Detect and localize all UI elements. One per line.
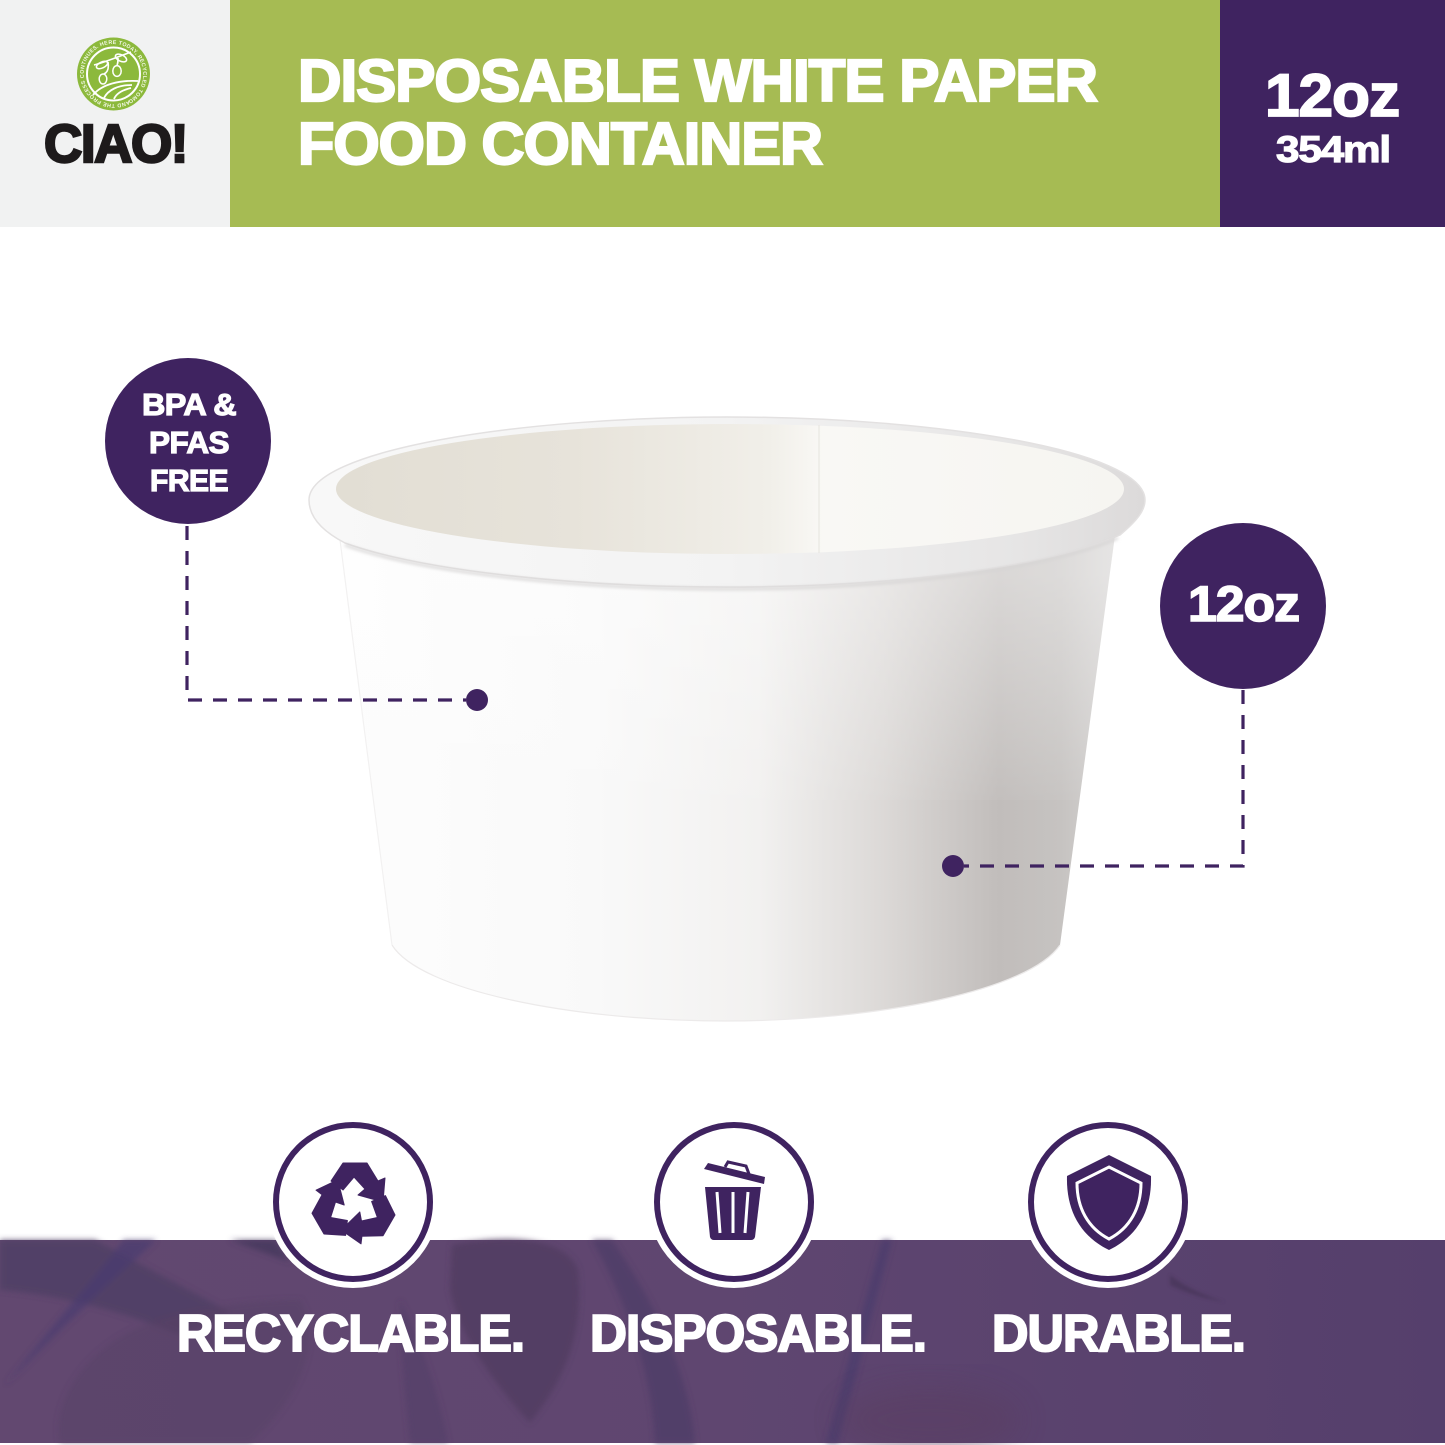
icon: trash can [648,1116,820,1288]
badge text: BPA & [142,387,236,422]
bottom band with leaf background [0,1239,1445,1445]
badge text: PFAS [149,425,229,460]
title: FOOD CONTAINER [298,111,822,177]
feature: disposable [590,1116,926,1363]
icon: recycle [267,1116,439,1288]
icon: green olive seal [77,38,150,110]
title: DISPOSABLE WHITE PAPER [298,48,1097,114]
badge text: 12oz [1188,576,1299,632]
feature: durable [992,1116,1245,1363]
container rim [309,417,1145,587]
icon: shield [1022,1116,1194,1288]
logo wordmark: CIAO! [44,114,187,174]
label: DISPOSABLE. [590,1305,926,1363]
size label: 354ml [1276,129,1390,170]
badge circle [1160,523,1326,689]
badge text: FREE [150,463,228,498]
callout: BPA & PFAS free [105,358,488,711]
callout: 12oz [942,523,1326,877]
product photo: white paper container [309,417,1145,1021]
label: DURABLE. [992,1305,1245,1363]
label: RECYCLABLE. [177,1305,524,1363]
badge circle [105,358,271,524]
container interior [336,424,1124,554]
logo: CIAO! [44,38,187,174]
feature: recyclable [177,1116,524,1363]
size label: 12oz [1265,62,1399,129]
container body [340,535,1115,1021]
badge text [142,387,236,498]
size label [1265,62,1399,170]
header bar [0,0,1445,227]
title [298,48,1097,177]
